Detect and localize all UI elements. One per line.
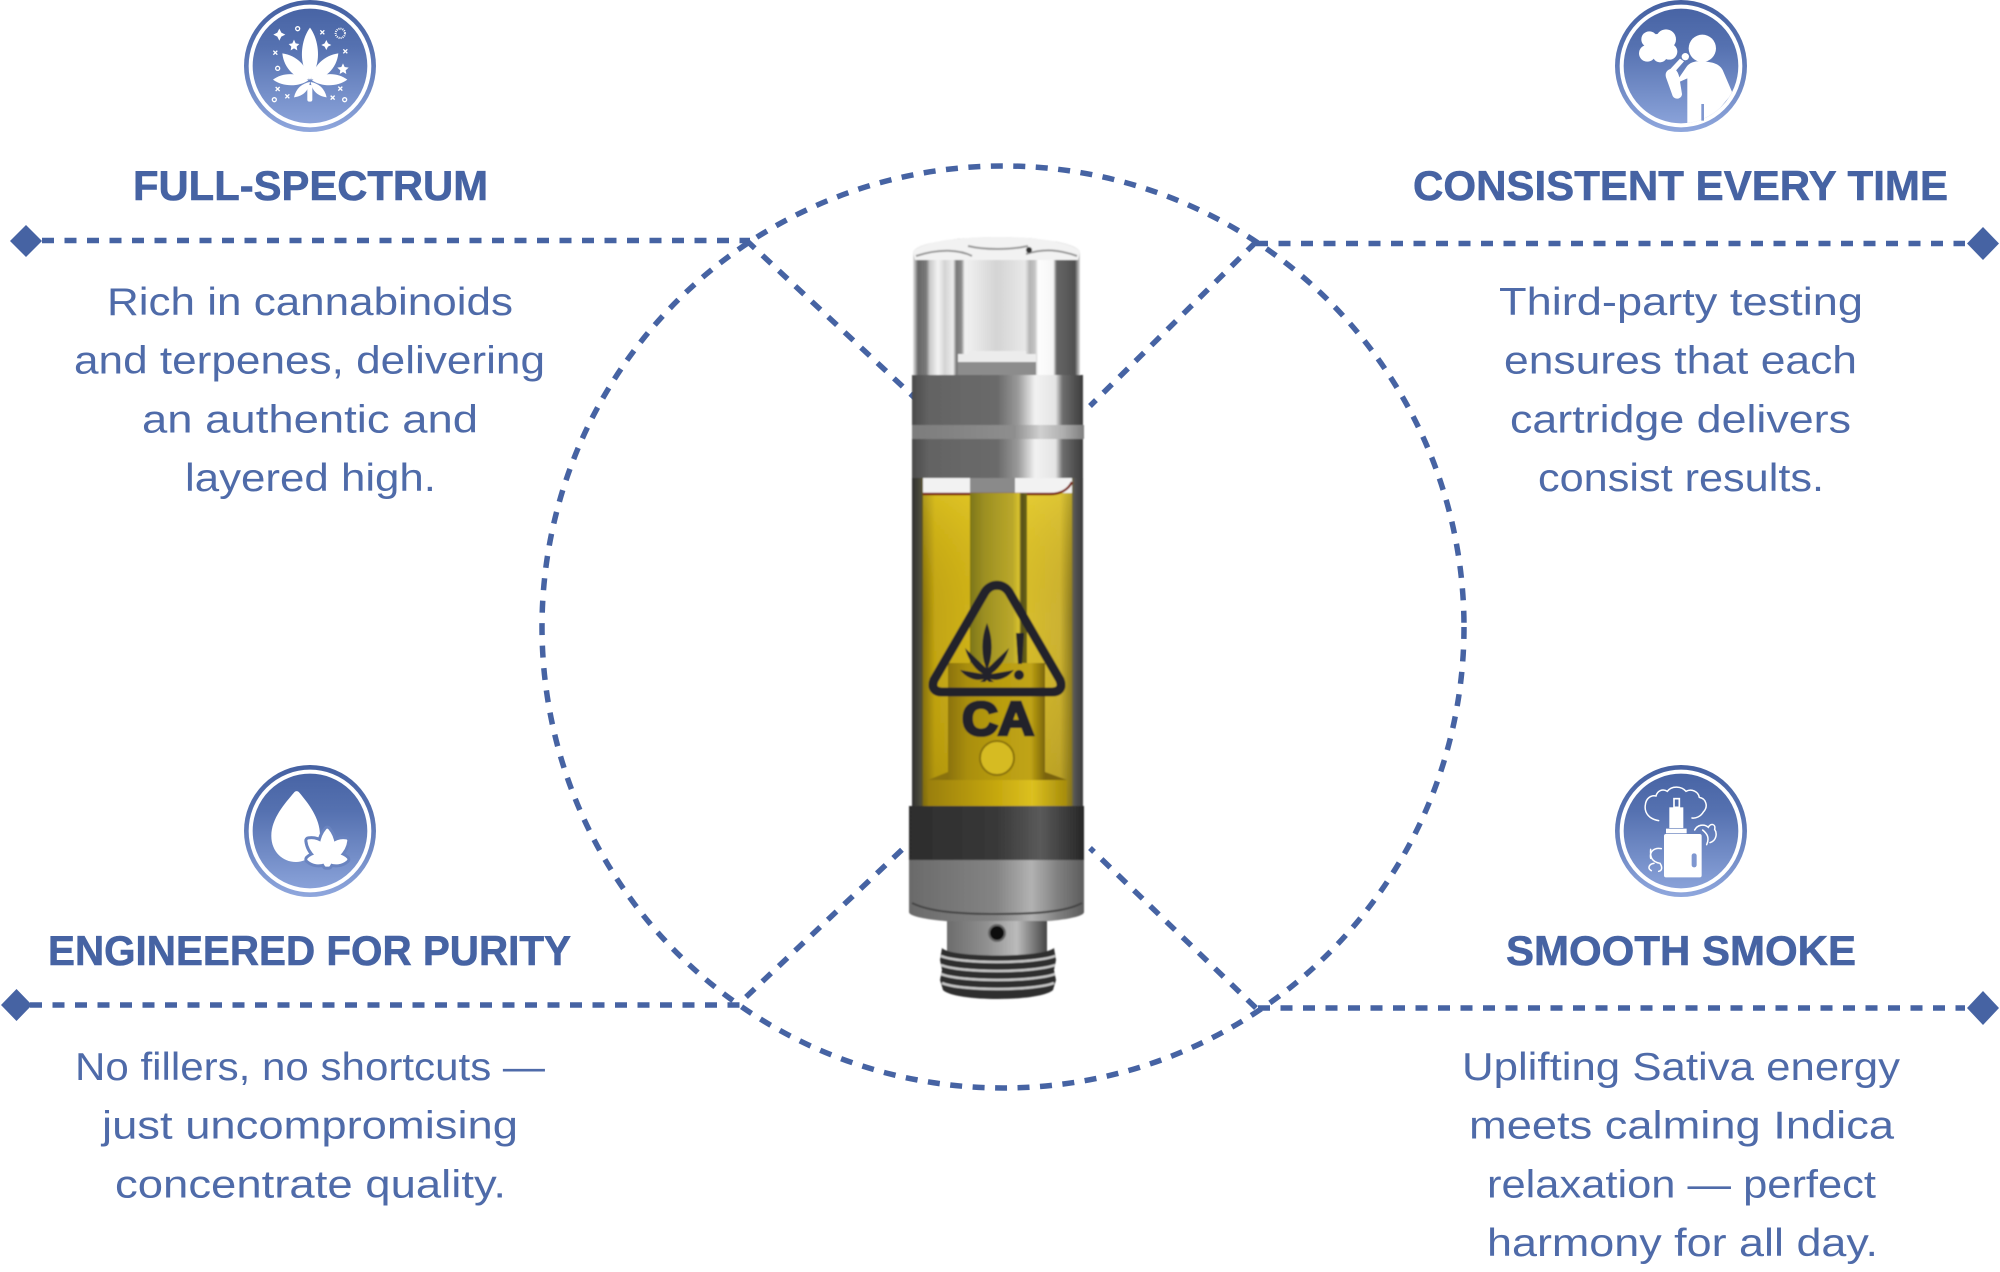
clear mouthpiece xyxy=(913,237,1080,376)
metal collar xyxy=(912,375,1084,478)
text block: full-spectrum description: Rich in cannabinoids xyxy=(107,281,513,324)
text block: purity description xyxy=(75,1046,545,1206)
text block: full-spectrum description xyxy=(74,281,545,500)
text block: consistent description: consist results. xyxy=(1538,457,1824,500)
heading: consistent every time: CONSISTENT EVERY TIME xyxy=(1413,162,1948,209)
text block: purity description: No fillers, no shortcuts — xyxy=(75,1046,545,1089)
panel: consistent every time xyxy=(1413,0,1948,500)
heading: full-spectrum: FULL-SPECTRUM xyxy=(133,162,488,209)
heading: smooth smoke: SMOOTH SMOKE xyxy=(1506,927,1856,974)
text block: purity description: concentrate quality. xyxy=(115,1164,506,1206)
text block: consistent description: cartridge delivers xyxy=(1510,398,1851,442)
panel: engineered for purity xyxy=(48,765,571,1206)
text block: smooth smoke description: Uplifting Sativa energy xyxy=(1462,1046,1901,1089)
grey base xyxy=(909,860,1084,923)
text block: full-spectrum description: layered high. xyxy=(185,457,436,500)
lower black band xyxy=(909,806,1084,860)
text block: full-spectrum description: and terpenes, delivering xyxy=(74,340,545,382)
icon: vape device with smoke xyxy=(1615,765,1747,897)
panel: smooth smoke xyxy=(1462,765,1901,1265)
warning symbol xyxy=(933,585,1061,745)
CA label: CA xyxy=(962,692,1034,745)
central dashed circle xyxy=(542,166,1464,1088)
diamond markers xyxy=(1,225,1999,1025)
text block: smooth smoke description xyxy=(1462,1046,1901,1265)
text block: consistent description: ensures that each xyxy=(1504,340,1857,382)
text block: consistent description: Third-party testing xyxy=(1499,281,1863,324)
text block: smooth smoke description: relaxation — perfect xyxy=(1487,1164,1876,1206)
text block: consistent description xyxy=(1499,281,1863,500)
icon: person vaping with cloud xyxy=(1615,0,1747,133)
icon: cannabis leaf with sparkles xyxy=(244,0,376,132)
cartridge illustration xyxy=(909,237,1084,999)
text block: smooth smoke description: meets calming Indica xyxy=(1469,1104,1894,1148)
icon: oil drop with leaf xyxy=(244,765,376,897)
oil tank xyxy=(912,478,1083,806)
text block: purity description: just uncompromising xyxy=(101,1104,518,1148)
text block: smooth smoke description: harmony for all day. xyxy=(1487,1222,1878,1265)
threaded connector xyxy=(940,921,1056,999)
text block: full-spectrum description: an authentic and xyxy=(142,398,478,442)
panel: full-spectrum xyxy=(74,0,545,500)
connector lines xyxy=(30,240,1965,1008)
heading: engineered for purity: ENGINEERED FOR PURITY xyxy=(48,927,571,974)
